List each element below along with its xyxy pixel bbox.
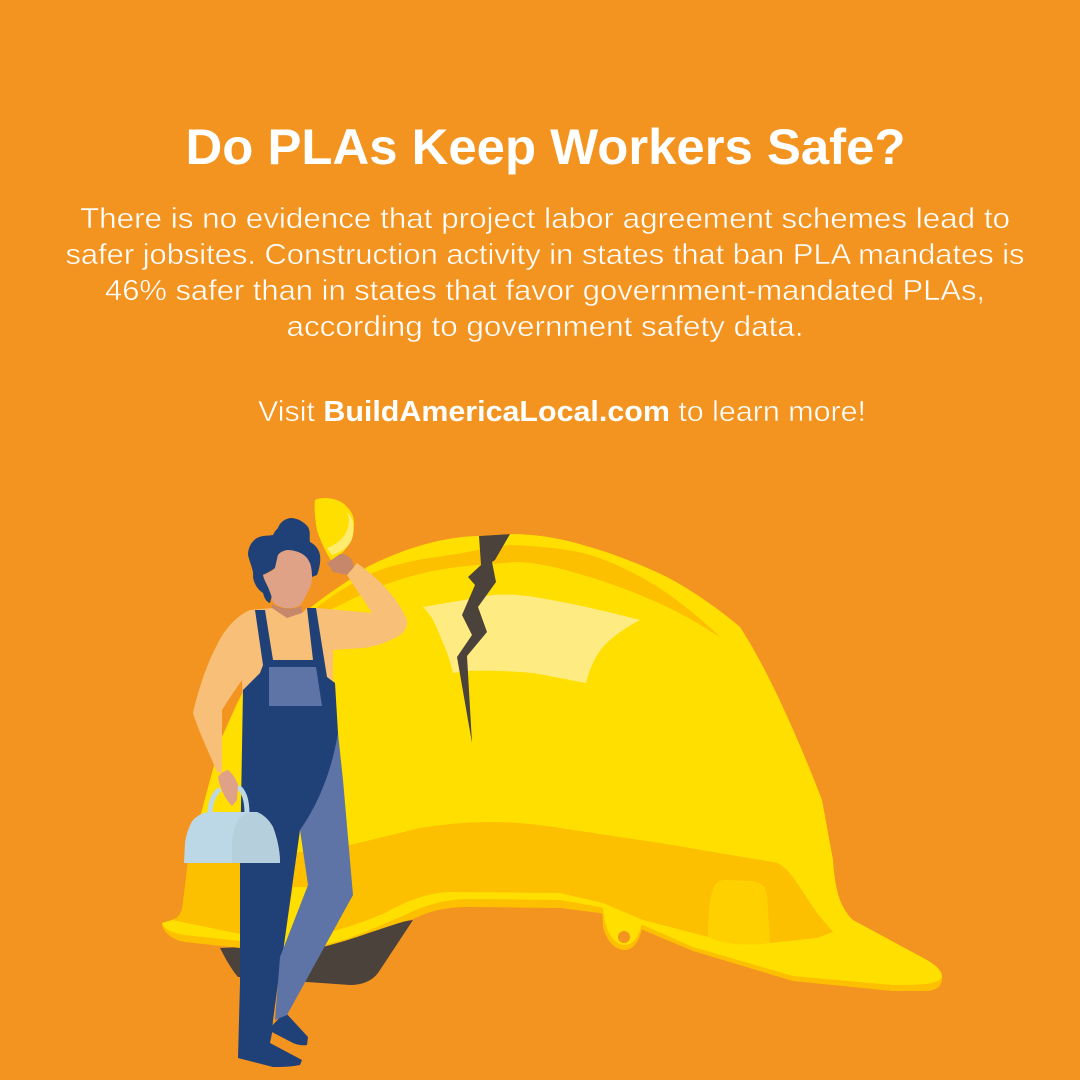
intro paragraph: safer jobsites. Construction activity in states that ban PLA mandates is	[66, 239, 1024, 271]
overalls	[238, 608, 338, 1067]
hat side clip	[708, 880, 770, 945]
yellow patch between legs	[283, 887, 308, 950]
hat lug front	[603, 906, 642, 945]
neck	[271, 604, 302, 618]
face	[263, 550, 312, 608]
far foot	[268, 1012, 308, 1045]
hat crest ridge	[317, 545, 720, 637]
hat inner shadow	[220, 920, 413, 985]
intro paragraph	[66, 203, 1024, 343]
illustration: cracked hard hat	[162, 534, 942, 991]
intro paragraph: according to government safety data.	[286, 311, 804, 343]
crack	[457, 534, 510, 743]
intro paragraph: 46% safer than in states that favor government-mandated PLAs,	[105, 275, 985, 307]
lower hand	[218, 770, 238, 806]
raised hand	[327, 554, 354, 575]
illustration: worker	[184, 498, 407, 1067]
overalls far leg	[275, 733, 353, 1020]
hat lower brim edge	[162, 850, 942, 991]
hair	[248, 518, 320, 603]
small hard hat	[315, 498, 354, 562]
hat shell	[162, 534, 942, 985]
title: Do PLAs Keep Workers Safe?	[186, 119, 906, 175]
call to action: Visit BuildAmericaLocal.com to learn more!	[258, 396, 866, 428]
intro paragraph: There is no evidence that project labor agreement schemes lead to	[80, 203, 1010, 235]
hat lug	[602, 905, 643, 950]
hat highlight	[423, 595, 640, 683]
lunch box	[184, 787, 280, 863]
bib pocket	[269, 667, 322, 706]
arm and torso	[193, 563, 407, 774]
hat band	[172, 822, 833, 944]
